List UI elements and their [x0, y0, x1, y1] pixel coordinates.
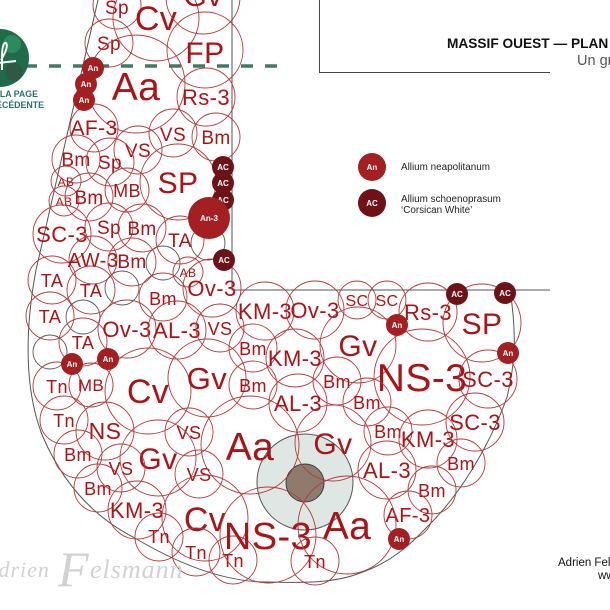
- plant: NS-3: NS-3: [224, 516, 312, 558]
- plant: TA: [67, 266, 115, 314]
- plant: AL-3: AL-3: [274, 391, 322, 416]
- plant: FP: [167, 12, 243, 88]
- plant: AF-3: AF-3: [70, 117, 118, 140]
- plant: AB: AB: [58, 175, 74, 189]
- plant: Bm: [229, 324, 277, 372]
- plant: Sp: [86, 138, 134, 186]
- plant: Sp: [85, 203, 133, 251]
- previous page button: [0, 29, 44, 110]
- plant: Cv: [162, 475, 248, 561]
- plant: AL-3: AL-3: [363, 458, 411, 483]
- plant: Bm: Bm: [239, 376, 267, 396]
- plant: Bm: [343, 378, 391, 426]
- marker: AC: AC: [218, 256, 230, 265]
- marker: An: [73, 89, 95, 111]
- plant: Sp: Sp: [97, 218, 121, 239]
- dashed section line: [25, 64, 278, 68]
- marker: AC: [494, 282, 516, 304]
- plant: Bm: Bm: [418, 481, 446, 501]
- plant: Bm: Bm: [447, 454, 475, 474]
- plant: NS-3: [220, 487, 316, 583]
- plant: Gv: Gv: [138, 443, 178, 476]
- plant: Cv: [105, 348, 191, 434]
- plant: SC-3: [459, 350, 517, 408]
- plant: Bm: Bm: [117, 252, 147, 273]
- marker: AC: [446, 283, 468, 305]
- plant: VS: [165, 408, 213, 456]
- plant: Bm: [408, 466, 456, 514]
- plant: SC-3: SC-3: [449, 410, 501, 435]
- plant: KM-3: KM-3: [110, 498, 164, 523]
- plant: Sp: [85, 19, 133, 67]
- legend label: Allium schoenoprasum: ‘Corsican White’: [401, 205, 472, 216]
- plant: VS: VS: [208, 319, 232, 339]
- plant: Bm: [65, 173, 113, 221]
- plant: Tn: [172, 528, 220, 576]
- plant: VS: [114, 126, 162, 174]
- plant: Ov-3: Ov-3: [102, 317, 152, 342]
- plant: VS: VS: [125, 141, 151, 162]
- plant: VS: [196, 304, 244, 352]
- plant: VS: VS: [177, 423, 201, 443]
- plant: Cv: Cv: [127, 373, 169, 411]
- plant: Ov-3: Ov-3: [290, 298, 340, 323]
- plant: Gv: Gv: [187, 361, 227, 396]
- plant: TA: [28, 256, 76, 304]
- plant: SP: [140, 144, 216, 220]
- plant: Aa: Aa: [112, 66, 160, 109]
- marker: AC: AC: [217, 163, 229, 172]
- plant: Tn: [209, 536, 257, 584]
- plant: KM-3: KM-3: [238, 299, 292, 324]
- plant: Tn: [291, 537, 339, 585]
- plant: Bm: [74, 464, 122, 512]
- plant: Bm: Bm: [149, 289, 177, 309]
- plant: Bm: Bm: [239, 339, 267, 359]
- plant: Aa: [87, 35, 185, 133]
- plant: FP: FP: [185, 37, 225, 70]
- plant: Tn: [135, 513, 183, 561]
- plant: Bm: Bm: [64, 445, 92, 465]
- plant: AL-3: AL-3: [153, 318, 201, 343]
- plant: KM-3: KM-3: [401, 427, 455, 452]
- plant: MB: [69, 363, 113, 407]
- plant: Tn: Tn: [53, 411, 75, 431]
- plant: AB: [51, 166, 81, 196]
- plant: Tn: Tn: [185, 543, 207, 563]
- marker: An: [386, 314, 408, 336]
- plant: Gv: [168, 339, 246, 417]
- legend label: Allium neapolitanum: Allium neapolitanum: [401, 162, 490, 173]
- plant: Bm: [139, 273, 187, 321]
- plant: Gv: [295, 405, 371, 481]
- plant: Aa: [201, 396, 299, 494]
- plant: Sp: Sp: [97, 34, 121, 55]
- marker: An: [388, 528, 410, 550]
- plant: AB: AB: [56, 195, 72, 209]
- marker: An: [497, 342, 519, 364]
- plant: AB: [173, 257, 203, 287]
- plant: Sp: Sp: [98, 153, 122, 174]
- plant: Sp: [93, 0, 141, 29]
- plant: MB: MB: [78, 376, 104, 395]
- plant: AW-3: AW-3: [68, 250, 118, 272]
- marker: An: An: [88, 64, 98, 73]
- plant: AF-3: AF-3: [386, 505, 430, 527]
- plant: Aa: Aa: [323, 505, 371, 548]
- marker: An: An: [67, 360, 77, 369]
- plant: Cv: Cv: [184, 501, 226, 539]
- marker: An: An: [81, 80, 91, 89]
- plant: Tn: [33, 362, 81, 410]
- plant: VS: VS: [187, 465, 211, 485]
- marker: AC: [212, 156, 234, 178]
- plant: AL-3: [148, 301, 206, 359]
- plant: Aa: [298, 476, 396, 574]
- plant: Cv: [113, 0, 199, 61]
- plant: SP: [443, 284, 521, 362]
- icon: forest photo circle: [0, 29, 29, 87]
- plant: Ov-3: [98, 300, 156, 358]
- marker: An: An: [392, 321, 402, 330]
- plant: Ov-3: Ov-3: [187, 276, 237, 301]
- plant: SC-3: SC-3: [36, 222, 88, 247]
- plant: SC-3: [33, 205, 91, 263]
- plant: KM-3: [108, 481, 166, 539]
- plant: SP: SP: [158, 167, 198, 200]
- plant: NS: [76, 402, 134, 460]
- plant: SC: [338, 281, 376, 319]
- plant: Tn: Tn: [148, 527, 170, 547]
- legend item: Allium neapolitanum: [358, 153, 386, 181]
- legend item: Allium schoenoprasum: AC: [366, 199, 378, 208]
- plant: VS: [175, 450, 223, 498]
- plant: Rs-3: [399, 283, 457, 341]
- plant: Bm: Bm: [61, 150, 91, 171]
- plant: SC-3: SC-3: [462, 367, 514, 392]
- plant: AW-3: [68, 236, 118, 284]
- plant: NS: NS: [89, 418, 121, 444]
- plant: NS-3: [374, 329, 470, 425]
- plant: KM-3: [236, 282, 294, 340]
- plant: AF-3: [70, 104, 118, 152]
- plant: Bm: Bm: [201, 128, 231, 149]
- plant: Gv: Gv: [313, 428, 353, 461]
- plant: Rs-3: Rs-3: [404, 300, 452, 325]
- title: MASSIF OUEST — PLAN: [447, 36, 608, 51]
- plant: AB: [49, 186, 79, 216]
- plant: Tn: [40, 396, 88, 444]
- marker: AC: [213, 249, 235, 271]
- plant: Bm: [437, 439, 485, 487]
- plant: TA: TA: [39, 307, 61, 327]
- plant: VS: [149, 109, 197, 157]
- plant: SC: SC: [375, 293, 399, 310]
- plant: Ov-3: [183, 259, 241, 317]
- plant: Rs-3: Rs-3: [182, 85, 230, 110]
- plant: TA: [156, 216, 204, 264]
- plant: MB: MB: [113, 181, 141, 201]
- marker: An-3: [188, 197, 230, 239]
- plant: SC: [368, 281, 406, 319]
- marker: An: [61, 353, 83, 375]
- legend label: Allium schoenoprasum: Allium schoenoprasum: [401, 194, 501, 205]
- plant: Cv: Cv: [135, 0, 177, 38]
- marker: An-3: An-3: [200, 214, 218, 223]
- plant: Bm: Bm: [374, 422, 402, 442]
- plant: Bm: Bm: [74, 188, 104, 209]
- legend item: Allium neapolitanum: An: [367, 163, 377, 172]
- plant: TA: TA: [80, 281, 102, 301]
- marker: AC: AC: [499, 289, 511, 298]
- marker: An: An: [503, 349, 513, 358]
- plant: Tn: Tn: [222, 551, 244, 571]
- plant: Bm: [52, 135, 100, 183]
- plant: Tn: Tn: [46, 377, 68, 397]
- plant: TA: [26, 292, 74, 340]
- plant: Gv: [166, 0, 240, 34]
- plant: KM-3: [399, 410, 457, 468]
- plant: MB: [105, 168, 149, 212]
- plant: Tn: Tn: [304, 552, 326, 572]
- plant: KM-3: [266, 329, 324, 387]
- marker: An: An: [394, 535, 404, 544]
- plant: Bm: [364, 407, 412, 455]
- plant: KM-3: KM-3: [268, 346, 322, 371]
- plant: Bm: Bm: [127, 219, 157, 240]
- plant: VS: [97, 444, 145, 492]
- marker: An: [75, 73, 97, 95]
- plant: VS: VS: [160, 125, 186, 146]
- grey reference circles: [33, 226, 225, 369]
- plant: Gv: [320, 307, 396, 383]
- signature: elsmann: [90, 555, 184, 584]
- plant: SC: SC: [345, 293, 369, 310]
- marker: An: [97, 348, 119, 370]
- marker: AC: AC: [217, 196, 229, 205]
- plant: Ov-3: [286, 281, 344, 339]
- marker: AC: [212, 189, 234, 211]
- plant: TA: TA: [41, 271, 63, 291]
- plant: TA: TA: [72, 333, 94, 353]
- signature: F: [57, 541, 89, 597]
- plant: Bm: [118, 204, 166, 252]
- plant: AL-3: [358, 441, 416, 499]
- plant: TA: TA: [168, 231, 192, 252]
- allium markers: [61, 57, 519, 550]
- marker: An: An: [79, 96, 89, 105]
- legend: [358, 153, 501, 217]
- title frame: [320, 0, 550, 72]
- plant: Rs-3: [177, 68, 235, 126]
- plant: Bm: Bm: [353, 393, 381, 413]
- plant: Aa: Aa: [226, 426, 274, 469]
- marker: An: [82, 57, 104, 79]
- plant: SC-3: [446, 393, 504, 451]
- plant: Bm: [108, 238, 156, 286]
- plant: Bm: [313, 357, 361, 405]
- plant: TA: [59, 318, 107, 366]
- plant: AF-3: [384, 491, 432, 539]
- plant: AL-3: [269, 374, 327, 432]
- plant: AB: AB: [180, 266, 196, 280]
- plant: VS: VS: [109, 459, 133, 479]
- marker: AC: AC: [217, 179, 229, 188]
- plant: Gv: [120, 420, 196, 496]
- plant: Gv: Gv: [338, 330, 378, 363]
- marker: AC: [212, 172, 234, 194]
- plant: NS-3: NS-3: [377, 357, 467, 400]
- plant: Bm: Bm: [323, 372, 351, 392]
- plant: Bm: Bm: [84, 479, 112, 499]
- plant: Bm: [54, 430, 102, 478]
- plant: SP: SP: [462, 308, 502, 341]
- legend item: Allium schoenoprasum: [358, 189, 386, 217]
- existing tree canopy: [257, 434, 353, 530]
- plant: Bm: [229, 361, 277, 409]
- plant: Bm: [192, 113, 240, 161]
- marker: AC: AC: [451, 290, 463, 299]
- marker: An: An: [103, 355, 113, 364]
